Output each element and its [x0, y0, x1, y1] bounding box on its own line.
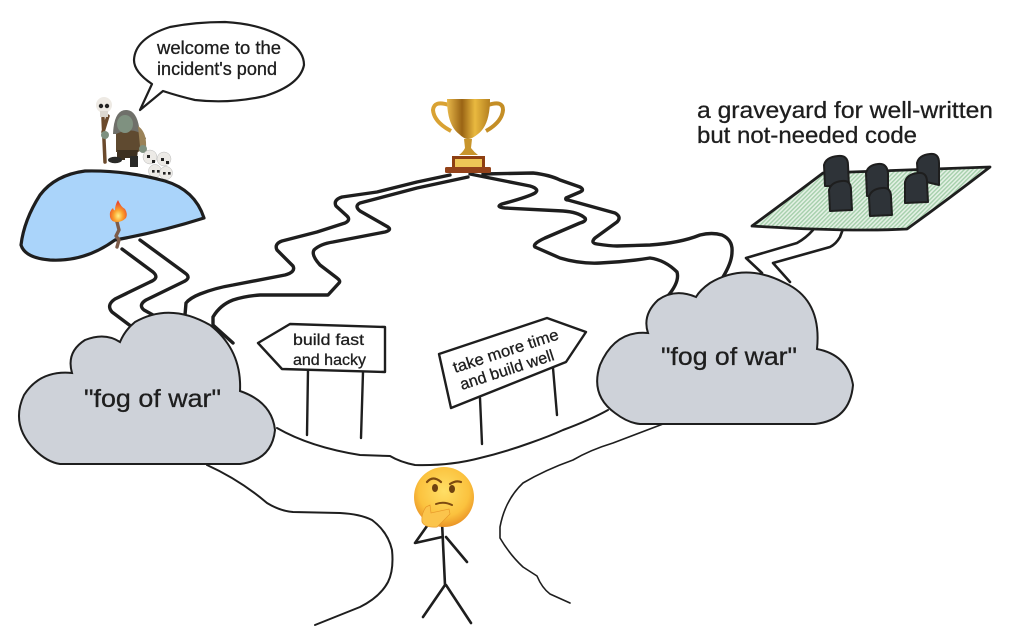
road: upper left to trophy — [185, 175, 450, 315]
bubble text line 2: incident's pond — [157, 59, 277, 79]
pond — [21, 171, 204, 260]
icon: torch in pond — [110, 200, 127, 247]
sign text line 2: and hacky — [293, 352, 366, 369]
trophy — [433, 99, 503, 173]
fog cloud left — [19, 313, 275, 464]
road: to graveyard, edge 2 — [773, 229, 843, 282]
road: left path from pond, edge 2 — [140, 240, 188, 315]
signpost: build fast and hacky — [258, 324, 385, 438]
sign text line 1: build fast — [293, 332, 365, 349]
speech bubble — [134, 22, 304, 110]
lower road: right edge — [500, 424, 663, 603]
caption line 1: a graveyard for well-written — [697, 97, 993, 123]
tombstones — [824, 154, 939, 216]
caption line 2: but not-needed code — [697, 122, 917, 148]
road: to graveyard, edge 1 — [746, 230, 813, 273]
lower road: between clouds — [277, 410, 608, 465]
road: upper right to trophy — [483, 173, 732, 277]
stick figure — [415, 522, 471, 623]
sign text line 1: take more time — [451, 327, 561, 377]
bubble text line 1: welcome to the — [156, 38, 281, 58]
sign text line 2: and build well — [458, 347, 556, 394]
icon: thinking face emoji — [414, 467, 474, 527]
icon: troll with skull staff — [96, 97, 147, 167]
fog cloud right — [597, 272, 853, 424]
road: lower left to trophy — [213, 177, 468, 343]
road: left path from pond, edge 1 — [110, 249, 156, 327]
signpost: take more time and build well — [439, 318, 586, 444]
icon: skull pile — [143, 150, 172, 180]
fog label right: "fog of war" — [661, 343, 797, 371]
road: lower right to trophy — [470, 174, 678, 297]
lower road: left edge — [207, 465, 392, 625]
graveyard ground — [752, 167, 990, 230]
fog label left: "fog of war" — [84, 385, 221, 413]
graveyard caption — [697, 97, 993, 148]
